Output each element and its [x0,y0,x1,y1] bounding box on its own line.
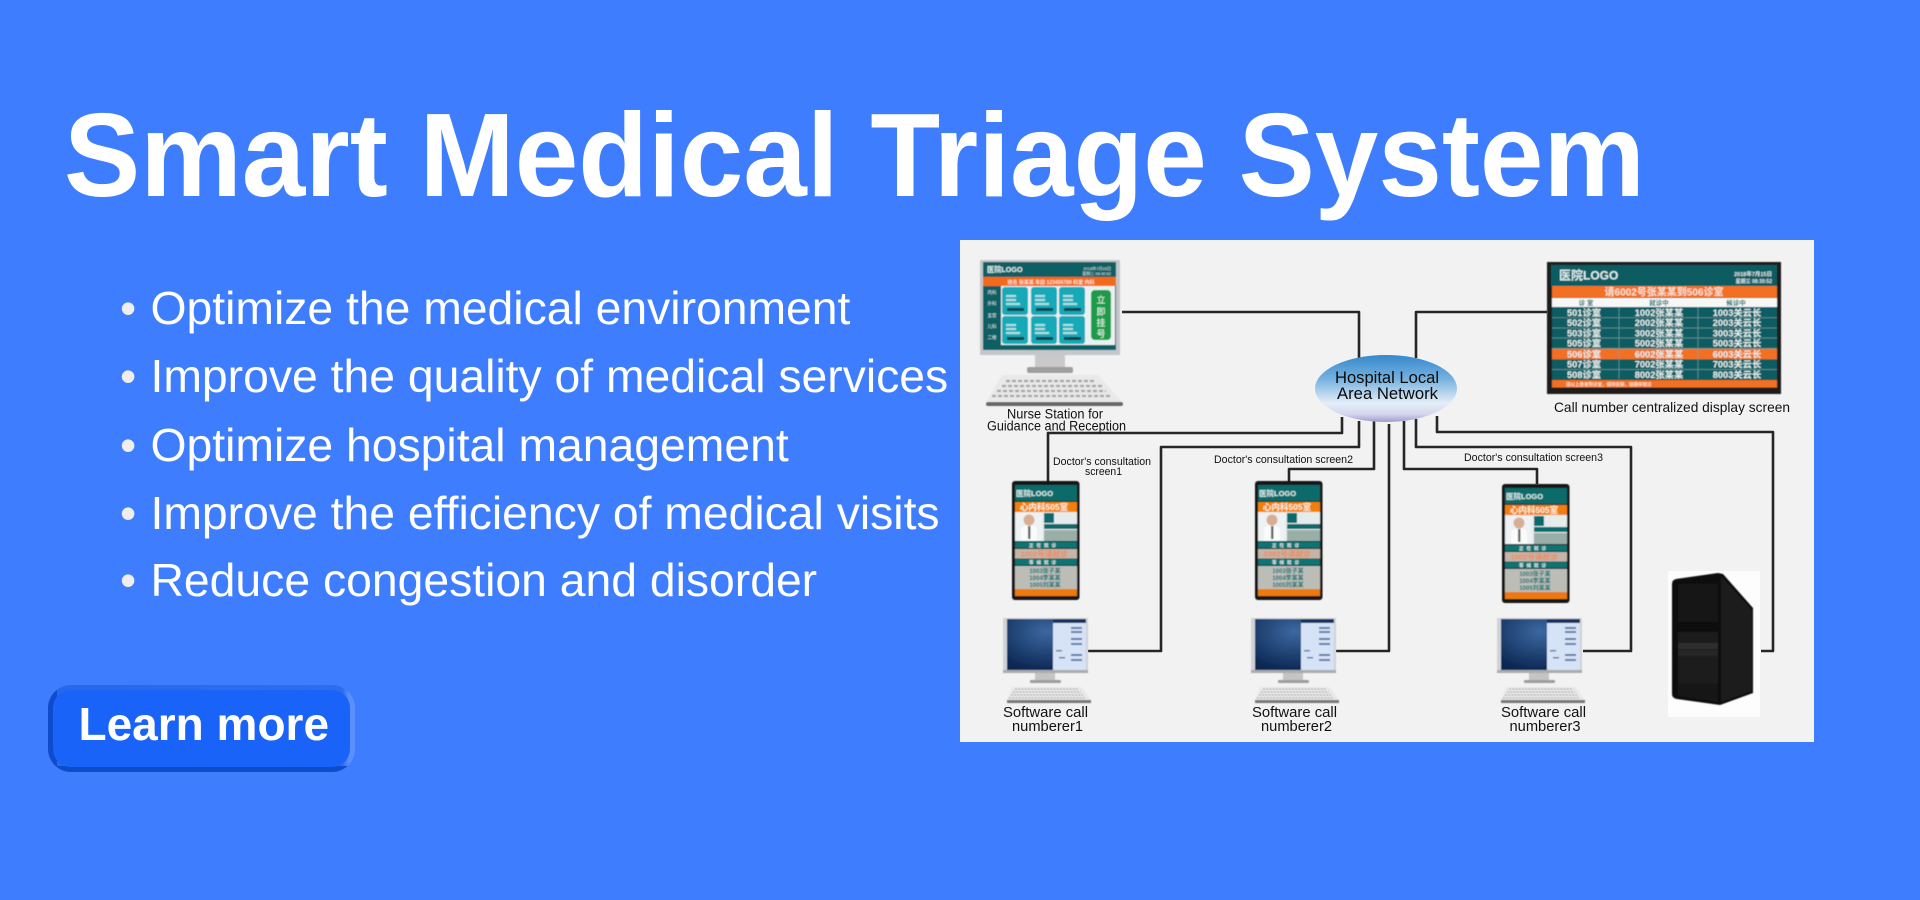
consultation tablet 3: 医院LOGO [1506,491,1543,501]
doctor's consultation label 3: Doctor's consultation screen3 [1464,452,1603,464]
consultation tablet 3: 1002号请就诊 [1510,552,1558,562]
software call numberer 3: numberer3 [1510,718,1580,735]
title: Smart Medical Triage System [64,89,1645,222]
software call numberer 1: numberer1 [1012,718,1083,735]
bullet 4: Improve the efficiency of medical visits [150,487,940,539]
panel background [960,240,1814,742]
call number centralized display screen: 507诊室 [1567,358,1601,370]
software call numberer 3 [1497,618,1586,735]
call number centralized display screen [1547,262,1790,415]
software call numberer 2: Software call [1252,704,1337,721]
nurse station computer: 医院LOGO [987,265,1023,274]
call number centralized display screen: 诊 室 [1579,298,1594,307]
consultation tablet 3: 1005刘某某 [1519,584,1551,592]
nurse station computer: 内科 [988,289,997,296]
call number centralized display screen: 5003关云长 [1713,338,1762,348]
call number centralized display screen: 501诊室 [1567,307,1601,318]
consultation tablet 1: 医院LOGO [1016,488,1053,498]
consultation tablet 3: 正在就诊 [1519,545,1549,552]
nurse station computer: 姓名 张某某 年龄 123456789 科室 内科 [1008,279,1094,286]
call number centralized display screen: 2018年7月15日 [1734,270,1772,278]
call number centralized display screen: 7002张某某 [1635,358,1684,370]
consultation tablet 3 [1502,484,1570,603]
call number centralized display screen: 星期三 08:30:52 [1736,278,1772,285]
bullet 3: Optimize hospital management [150,419,789,471]
button: learn more: Learn more [78,698,329,750]
nurse station computer: 2018年7月15日 [1083,265,1111,271]
consultation tablet 2: 医院LOGO [1259,488,1296,498]
consultation tablet 1 [1012,481,1080,600]
call number centralized display screen: 候诊中 [1726,298,1746,307]
bullet 2: Improve the quality of medical services [150,350,948,402]
doctor's consultation label 2: Doctor's consultation screen2 [1214,454,1353,466]
nurse station computer: Guidance and Reception [987,418,1126,434]
bullet 2: • [120,350,136,402]
consultation tablet 2: 1005刘某某 [1272,581,1304,589]
bullet list [120,282,948,606]
bullet 1: Optimize the medical environment [150,282,850,334]
consultation tablet 1: 1003张子某 [1029,567,1061,575]
consultation tablet 3: 1003张子某 [1519,570,1551,578]
consultation tablet 2 [1255,481,1322,600]
software call numberer 1 [1003,618,1091,735]
hospital local area network node: Hospital Local [1335,369,1439,387]
software call numberer 3: Software call [1501,704,1586,721]
software call numberer 2 [1251,618,1339,735]
consultation tablet 3: 1004李某某 [1519,577,1551,585]
consultation tablet 2: 1003张子某 [1272,567,1304,575]
hospital local area network node: Area Network [1337,385,1439,403]
doctor's consultation label 1: screen1 [1085,466,1122,478]
call number centralized display screen: 503诊室 [1567,328,1601,338]
nurse station computer: 儿科 [988,323,997,330]
call number centralized display screen: 5002张某某 [1635,338,1684,348]
consultation tablet 1: 1004李某某 [1029,574,1061,582]
call number centralized display screen: 8002张某某 [1635,369,1684,380]
call number centralized display screen: 505诊室 [1567,338,1601,348]
nurse station label: Nurse Station for [1007,406,1103,422]
nurse station computer [980,260,1126,434]
call number centralized display screen: 2003关云长 [1713,317,1762,328]
call number centralized display screen: 508诊室 [1567,369,1601,380]
call number centralized display screen: 502诊室 [1567,317,1601,328]
call number centralized display screen: 8003关云长 [1713,369,1762,380]
consultation tablet 2: 等候就诊 [1272,559,1302,566]
network cables [1048,312,1773,651]
nurse station computer: 二楼 [988,334,997,341]
nurse station computer: 挂 [1096,317,1106,328]
bullet 5: • [120,554,136,606]
icon: server tower [1668,571,1760,717]
consultation tablet 1: 等候就诊 [1029,559,1059,566]
nurse station computer: 五官 [988,312,997,319]
doctor's consultation label 1 [1053,456,1151,478]
call number centralized display screen: 6003关云长 [1713,348,1762,360]
hospital local area network node [1315,355,1457,422]
consultation tablet 2: 心内科505室 [1263,502,1312,512]
nurse station computer: 外科 [988,300,997,307]
bullet 4: • [120,487,136,539]
call number centralized display screen: 506诊室 [1567,348,1601,360]
bullet 3: • [120,419,136,471]
call number centralized display screen: 1002张某某 [1635,307,1684,318]
bullet 5: Reduce congestion and disorder [150,554,817,606]
consultation tablet 3: 心内科505室 [1510,505,1559,515]
consultation tablet 1: 正在就诊 [1029,542,1059,549]
call number centralized display screen: 医院LOGO [1559,268,1618,282]
display screen label: Call number centralized display screen [1554,399,1790,415]
nurse station computer: 星期三 08:30:52 [1082,270,1112,276]
nurse station computer: 立 [1096,294,1106,305]
button: learn more [48,685,355,772]
consultation tablet 1: 心内科505室 [1020,502,1069,512]
call number centralized display screen: 6002张某某 [1635,348,1684,360]
consultation tablet 2: 正在就诊 [1272,542,1302,549]
nurse station computer: 号 [1096,329,1106,339]
call number centralized display screen: 就诊中 [1649,298,1669,307]
bullet 1: • [120,282,136,334]
doctor's consultation label 1: Doctor's consultation [1053,456,1151,468]
consultation tablet 1: 1002号请就诊 [1020,548,1068,558]
nurse station computer: 即 [1096,307,1106,317]
software call numberer 2: numberer2 [1261,718,1332,735]
consultation tablet 2: 1002号请就诊 [1263,548,1311,558]
software call numberer 1: Software call [1003,704,1088,721]
call number centralized display screen: 请6002号张某某到506诊室 [1605,286,1723,298]
consultation tablet 3: 等候就诊 [1519,562,1549,569]
call number centralized display screen: 1003关云长 [1713,307,1762,318]
call number centralized display screen: 请以上患者到诊室，保持安静，按顺序就诊 [1566,381,1652,388]
consultation tablet 2: 1004李某某 [1272,574,1304,582]
call number centralized display screen: 7003关云长 [1713,358,1762,370]
consultation tablet 1: 1005刘某某 [1029,581,1061,589]
call number centralized display screen: 2002张某某 [1635,317,1684,328]
call number centralized display screen: 3003关云长 [1713,328,1762,338]
call number centralized display screen: 3002张某某 [1635,328,1684,338]
